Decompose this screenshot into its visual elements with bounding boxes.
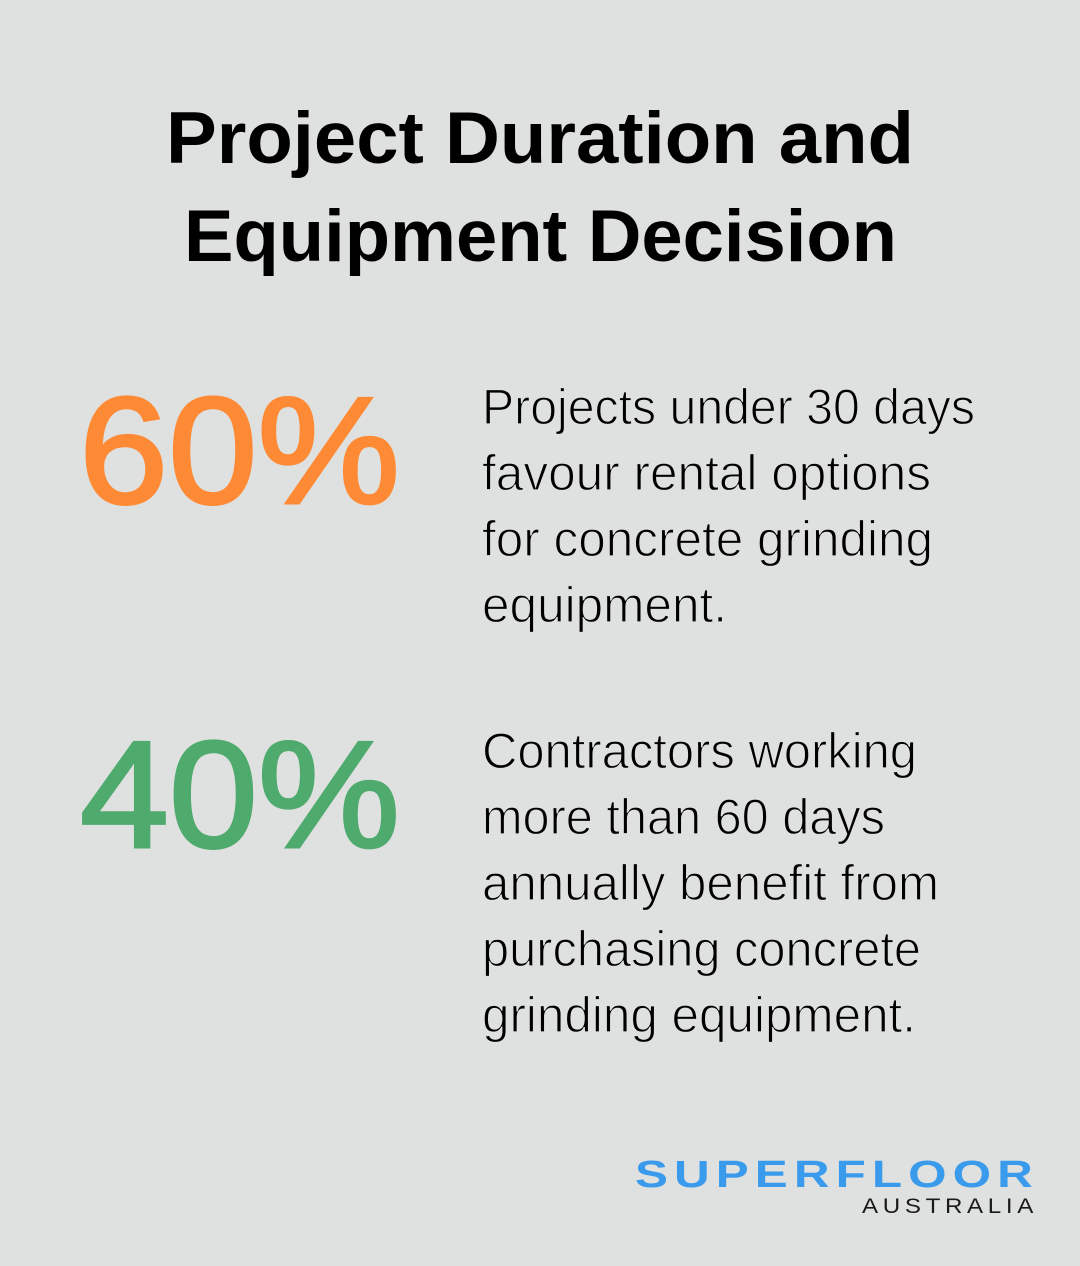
text: purchase description: purchasing concrete <box>482 921 921 977</box>
text: purchase description <box>482 723 939 1043</box>
stat: 60%: 60% <box>79 366 400 536</box>
title: Project Duration and <box>166 98 914 179</box>
panel: 40% statistic <box>80 710 939 1043</box>
logo: Superfloor Australia: AUSTRALIA <box>862 1194 1034 1218</box>
text: purchase description: more than 60 days <box>482 789 885 845</box>
title <box>166 98 914 277</box>
text: purchase description: grinding equipment. <box>482 987 916 1043</box>
panel: 60% statistic <box>79 366 975 633</box>
text: rental description <box>482 379 975 633</box>
stat: 40%: 40% <box>80 710 400 880</box>
text: purchase description: annually benefit from <box>482 855 939 911</box>
title: Equipment Decision <box>184 196 897 277</box>
logo: Superfloor Australia <box>635 1153 1034 1218</box>
text: rental description: equipment. <box>482 577 727 633</box>
text: rental description: for concrete grinding <box>482 511 933 567</box>
text: rental description: favour rental options <box>482 445 931 501</box>
text: rental description: Projects under 30 days <box>482 379 975 435</box>
logo: Superfloor Australia: SUPERFLOOR <box>635 1153 1033 1196</box>
text: purchase description: Contractors working <box>482 723 917 779</box>
